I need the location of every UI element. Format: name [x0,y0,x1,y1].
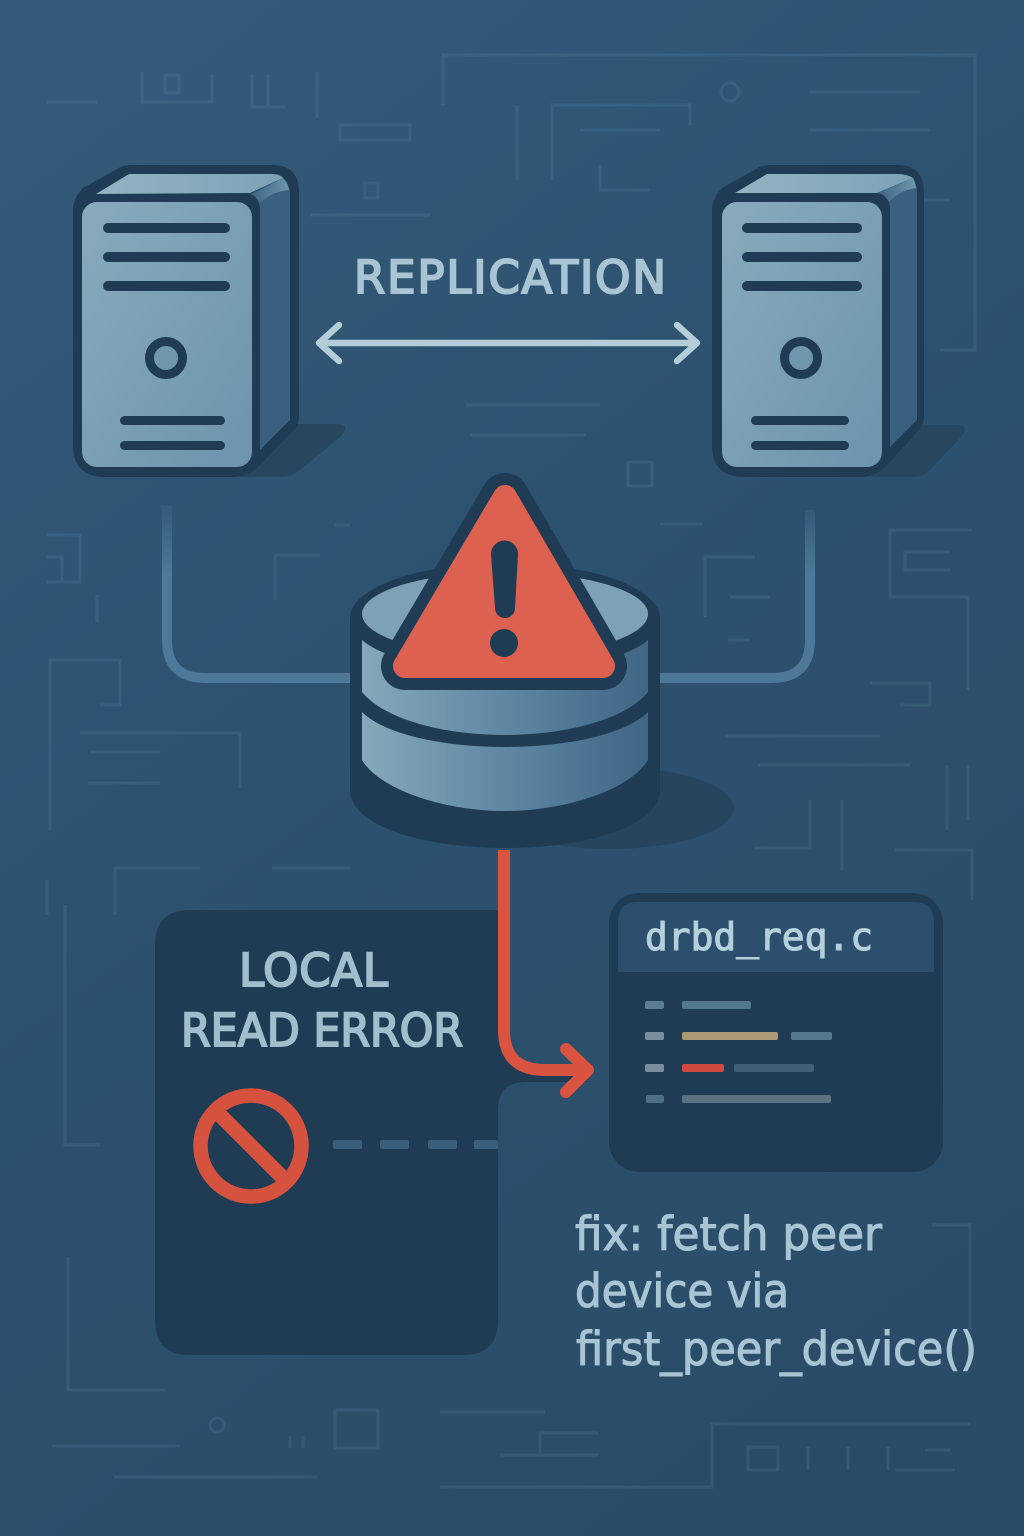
dashed failed link [333,1140,498,1149]
connector lines from servers to disk [167,505,810,678]
replication label: REPLICATION [354,251,666,304]
top face [735,174,913,193]
panel: source file [609,893,943,1172]
panel: local read error [155,910,590,1355]
panel heading [181,944,463,1057]
disk top [362,572,648,656]
red arrow to source file [504,850,588,1092]
database shadow [486,767,734,849]
panel heading: LOCAL [239,944,388,997]
front panel [722,202,882,467]
side highlight [252,178,289,203]
fix note [575,1207,977,1376]
database with warning [350,497,734,849]
side highlight [879,178,916,202]
server shadow [870,425,965,477]
panel heading: READ ERROR [181,1004,463,1057]
server shadow [240,424,345,477]
replication double arrow [319,325,697,361]
database body [350,563,660,848]
front panel [82,202,252,467]
fix note: fix: fetch peer [575,1207,882,1261]
server body outline [712,165,924,477]
power button [784,342,818,374]
drive slots [103,223,230,450]
side face [250,178,290,450]
server: primary [73,165,345,477]
file name: drbd_req.c [645,915,873,960]
top face [96,174,283,194]
power button [150,342,182,374]
lower disk band [362,712,648,811]
fix note: first_peer_device() [576,1322,977,1376]
side face [877,178,917,447]
server body outline [73,165,299,477]
icon: prohibited [200,1096,302,1196]
code lines [645,1001,832,1103]
file tab header [618,902,934,972]
drive slots [742,223,862,450]
upper disk band [362,640,648,735]
server: secondary [712,165,965,477]
exclamation mark [491,540,518,618]
fix note: device via [575,1264,789,1318]
warning triangle [405,497,603,666]
